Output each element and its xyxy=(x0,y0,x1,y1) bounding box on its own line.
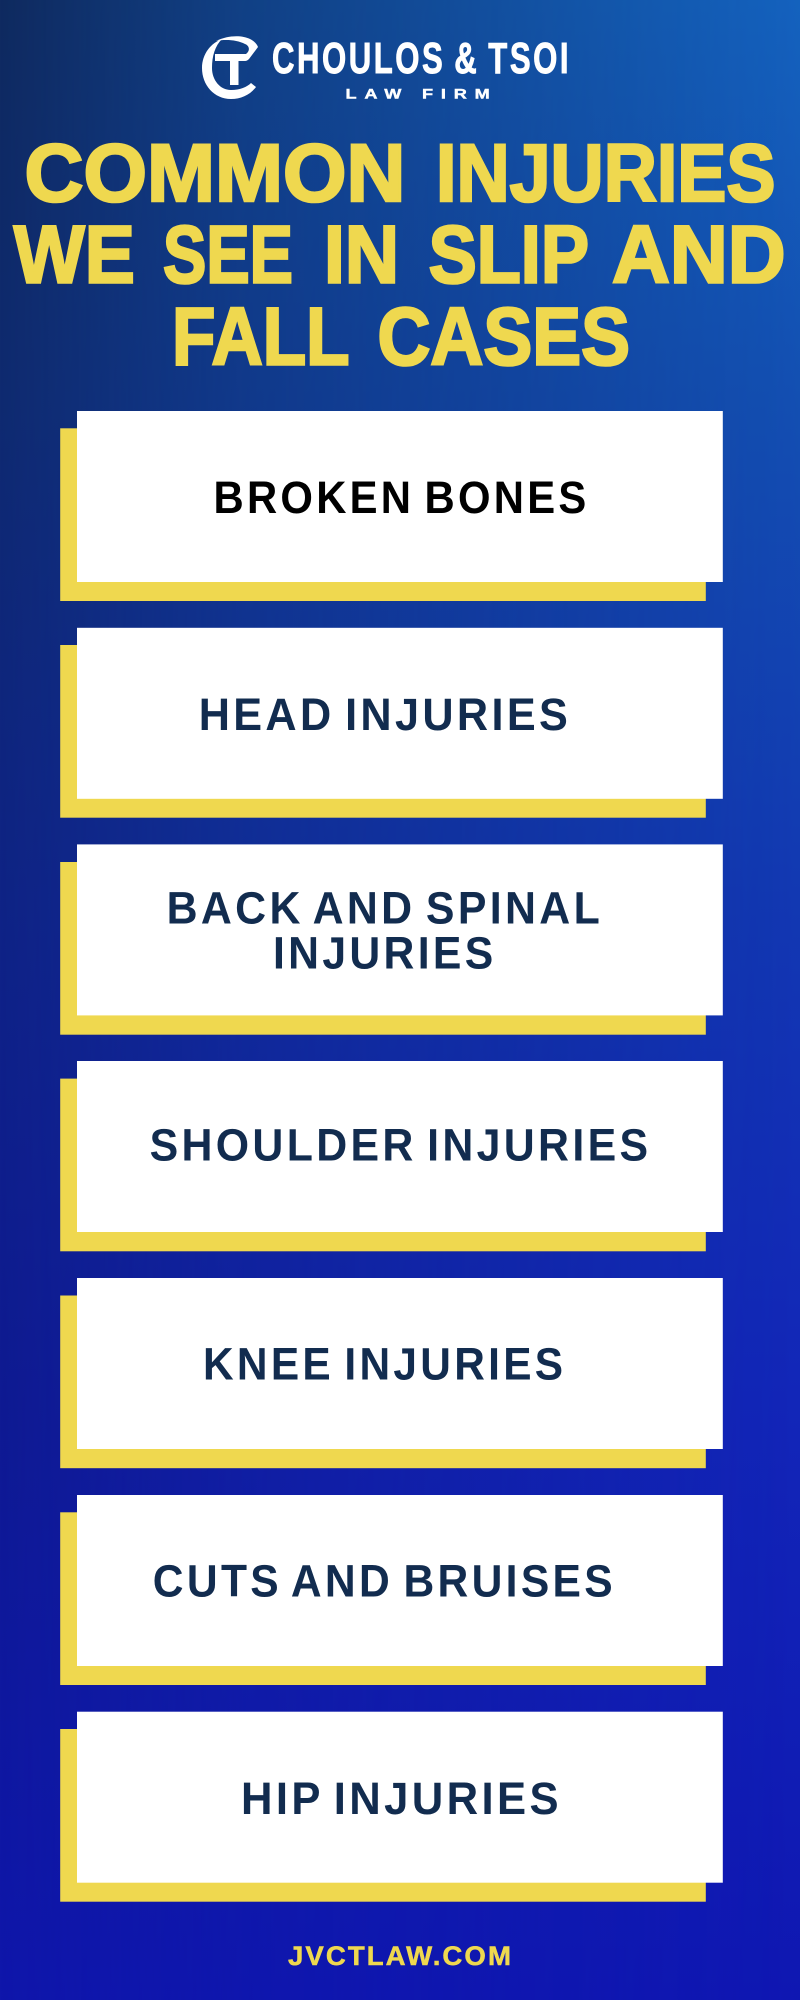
title: SEE xyxy=(163,210,293,300)
label: cuts and bruises: CUTS AND BRUISES xyxy=(153,1556,616,1607)
title xyxy=(14,128,786,382)
icon: CT monogram xyxy=(202,36,258,99)
label: hip injuries: HIP INJURIES xyxy=(241,1773,562,1824)
firm subtitle: LAW FIRM xyxy=(346,85,498,101)
title: IN xyxy=(324,210,399,300)
label: back and spinal injuries: BACK AND SPINAL xyxy=(167,883,603,934)
label: head injuries: HEAD INJURIES xyxy=(199,689,571,740)
title: WE xyxy=(14,210,135,300)
panel: knee injuries xyxy=(60,1278,723,1468)
label: back and spinal injuries: INJURIES xyxy=(273,928,496,979)
panel: hip injuries xyxy=(60,1712,723,1902)
panel: broken bones xyxy=(60,411,723,601)
panel: back and spinal injuries xyxy=(60,844,723,1035)
title: COMMON xyxy=(24,128,406,219)
firm name: CHOULOS & TSOI xyxy=(272,35,571,83)
panel: head injuries xyxy=(60,628,723,818)
label: knee injuries: KNEE INJURIES xyxy=(203,1339,566,1390)
title: CASES xyxy=(378,292,630,382)
panel: cuts and bruises xyxy=(60,1495,723,1685)
label: broken bones: BROKEN BONES xyxy=(214,472,590,523)
panel: shoulder injuries xyxy=(60,1061,723,1251)
title: SLIP xyxy=(429,210,589,300)
logo: Choulos & Tsoi Law Firm xyxy=(202,35,571,101)
title: FALL xyxy=(172,292,350,382)
label: shoulder injuries: SHOULDER INJURIES xyxy=(150,1120,651,1171)
title: AND xyxy=(612,210,786,300)
footer: website: JVCTLAW.COM xyxy=(288,1941,513,1971)
label: back and spinal injuries xyxy=(167,883,603,979)
